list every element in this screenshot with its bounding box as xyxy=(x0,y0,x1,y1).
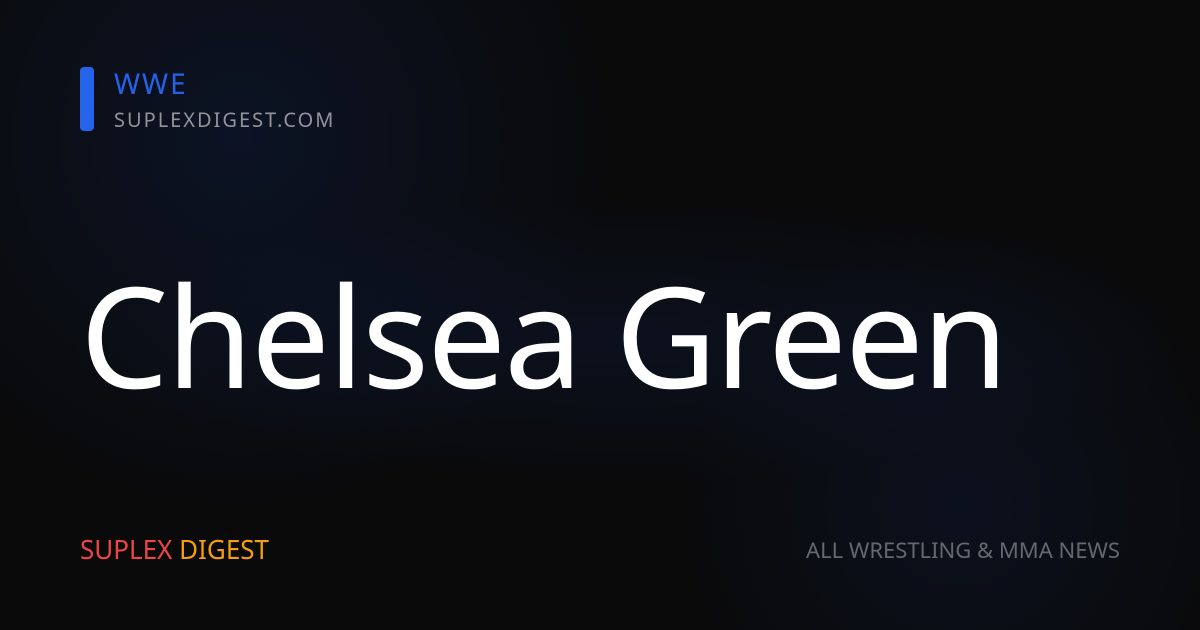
brand name: SUPLEX DIGEST xyxy=(80,531,269,567)
title: Chelsea Green xyxy=(80,239,1006,430)
category label: WWE xyxy=(114,65,188,103)
accent bar xyxy=(80,67,94,131)
site domain: SUPLEXDIGEST.COM xyxy=(114,106,335,133)
tagline: ALL WRESTLING & MMA NEWS xyxy=(806,535,1120,565)
